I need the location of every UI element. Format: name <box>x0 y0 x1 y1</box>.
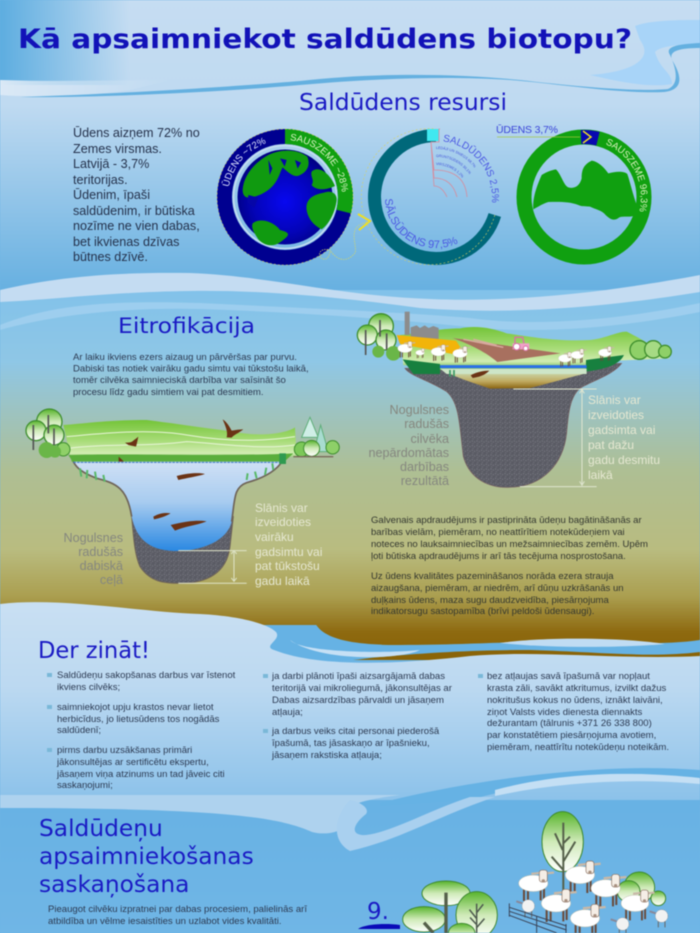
heading: Saldūdeņu apsaimniekošanas saskaņošana: Saldūdeņu <box>39 815 163 842</box>
pointer: water share <box>497 131 591 143</box>
labels: fresh water breakdown <box>436 146 476 178</box>
chart: salt and fresh water ring <box>360 128 502 266</box>
label: human-caused sediment: nepārdomātas <box>368 446 449 460</box>
text block: water quality signs: duļķains ūdens, maza sugu daudzveidība, piesārņojuma <box>371 595 609 606</box>
label: land 28%: SAUSZEME ~28% <box>290 133 349 192</box>
label: human-caused layer time: laikā <box>588 468 613 482</box>
right trees <box>293 417 339 457</box>
label: human-caused sediment: darbības <box>400 460 449 474</box>
text block: eutrophication intro: Dabiski tas notiek vairāku gadu simtu vai tūkstošu laikā, <box>73 364 309 374</box>
label: water 3.7%: ŪDENS 3,7% <box>496 124 558 136</box>
small trees <box>617 872 666 906</box>
meadow <box>63 420 297 462</box>
label: natural layer time: pat tūkstošu <box>255 559 320 573</box>
text block: water intro: Ūdenim, īpaši <box>73 188 150 202</box>
list: column 1: ikviens cilvēks; <box>57 682 120 693</box>
heading: Eitrofikācija: Eitrofikācija <box>118 314 255 338</box>
text block: water quality signs: indikatorsugu sastopamība (brīvi peldoši ūdensaugi). <box>371 606 594 617</box>
left trees <box>26 409 70 458</box>
list: column 1: jāsaņem viņa atzinums un tad jāveic citi <box>56 769 225 780</box>
label: salt water 97.5%: SĀLSŪDENS 97,5% <box>384 198 458 250</box>
label: human-caused layer time: gadsimta vai <box>588 423 655 437</box>
label: land 96.3%: SAUSZEME 96,3% <box>606 138 648 212</box>
list: column 2: ja darbi plānoti īpaši aizsargājamā dabas <box>271 671 445 682</box>
list: column 3: bez atļaujas savā īpašumā var nopļaut <box>487 671 650 682</box>
lake water <box>73 462 282 551</box>
flat-topped trees <box>403 881 497 933</box>
fish <box>471 371 489 378</box>
text block: coordination intro: Pieaugot cilvēku izpratnei par dabas procesiem, palielinās arī <box>48 904 307 915</box>
label: human-caused layer time: izveidoties <box>588 408 644 422</box>
text block: main threats: barības vielām, piemēram, no neattīrītiem notekūdeņiem vai <box>371 527 625 538</box>
mud layer <box>450 374 583 389</box>
list: column 1: herbicīdus, jo lietusūdens tos nogādās <box>57 714 220 725</box>
layer thickness marker <box>513 389 597 487</box>
label: water 72%: ŪDENS ~72% <box>221 137 266 187</box>
label: human-caused layer time: gadu desmitu <box>588 453 660 467</box>
label: natural sediment: Nogulsnes <box>63 531 123 545</box>
birds <box>119 419 243 462</box>
text block: water intro: būtnes dzīvē. <box>73 250 148 264</box>
list: column 2: jāsaņem rakstiska atļauja; <box>271 750 382 761</box>
chart: Earth water and land ring <box>216 128 354 266</box>
flock of sheep <box>516 861 668 933</box>
list: column 3: krasta zāli, savākt atkritumus, izvilkt dažus <box>487 683 667 694</box>
labels: fresh water breakdown: LEDĀJI UN SNIEGS 68,7% <box>436 146 476 168</box>
list: column 2: īpašumā, tas jāsaskaņo ar īpašnieku, <box>272 738 430 749</box>
label: natural sediment: ceļā <box>100 573 123 587</box>
page number: 9. <box>367 899 389 925</box>
tall tree <box>542 812 583 893</box>
label: natural layer time: Slānis var <box>255 501 308 515</box>
factory <box>405 312 439 340</box>
text block: water intro: saldūdenim, ir būtiska <box>73 204 195 218</box>
ploughed field <box>453 338 561 362</box>
list: column 1: saimniekojot upju krastos nevar lietot <box>57 702 214 713</box>
text block: water intro: bet ikvienas dzīvas <box>73 235 179 249</box>
list: column 3: piemēram, neattīrītu notekūdeņu noteikām. <box>487 742 669 753</box>
reeds <box>80 463 273 482</box>
text block: eutrophication intro: tomēr cilvēka saimnieciskā darbība var saīsināt šo <box>73 375 286 386</box>
text block: eutrophication intro: Ar laiku ikviens ezers aizaug un pārvēršas par purvu. <box>73 352 297 363</box>
sheep <box>398 341 614 367</box>
label: human-caused sediment: cilvēka <box>410 432 449 446</box>
label: fresh water 2.5%: SALDŪDENS 2,5% <box>443 134 500 203</box>
left trees <box>357 314 401 361</box>
meadow <box>400 327 670 370</box>
icon: globe <box>238 150 337 245</box>
list: column 1: jākonsultējas ar sertificētu ekspertu, <box>56 757 209 768</box>
text block: main threats: ļoti būtiska apdraudējums ir arī tās tecējuma nosprostošana. <box>371 551 626 562</box>
layer thickness marker <box>178 551 247 583</box>
text block: water intro: teritorijas. <box>73 173 128 187</box>
list: column 3: nokritušus kokus no ūdens, iznākt laivāni, <box>487 695 663 706</box>
heading: Saldūdeņu apsaimniekošanas saskaņošana: apsaimniekošanas <box>39 843 254 870</box>
page number <box>358 899 400 929</box>
list: column 2: teritorijā vai mikroliegumā, jākonsultējas ar <box>272 683 453 694</box>
list: column 2: Dabas aizsardzības pārvaldi un jāsaņem <box>272 695 444 706</box>
text block: water intro: Latvijā - 3,7% <box>73 157 149 171</box>
list: column 2: ja darbus veiks citai personai piederošā <box>271 726 440 737</box>
illustration: eutrophic lake cross-section <box>357 312 671 487</box>
label: human-caused layer time: pat dažu <box>588 438 634 452</box>
icon: map of Latvia <box>533 161 637 220</box>
labels: fresh water breakdown: VIRSZEMES 1,2% <box>436 162 464 178</box>
text block: main threats: Galvenais apdraudējums ir pastiprināta ūdeņu bagātināšanās ar <box>371 515 642 526</box>
label: natural sediment: dabiskā <box>80 559 123 573</box>
list: column 1: saskaņojumi; <box>57 780 113 791</box>
label: natural sediment: radušās <box>78 545 123 559</box>
right bushes <box>630 341 671 359</box>
text block: water intro: Zemes virsmas. <box>73 142 162 156</box>
reeds and banks <box>403 359 440 374</box>
text block: water intro: Ūdens aizņem 72% no <box>73 126 200 140</box>
list: column 1: Saldūdeņu sakopšanas darbus var īstenot <box>57 670 236 681</box>
list: column 1: pirms darbu uzsākšanas primāri <box>57 745 192 756</box>
label: human-caused sediment: Nogulsnes <box>389 403 449 417</box>
label: natural layer time: izveidoties <box>255 515 311 529</box>
text block: water intro: nozīme ne vien dabas, <box>73 219 200 233</box>
labels: fresh water breakdown: GRUNTSŪDENS 30,1% <box>436 154 471 174</box>
tractor <box>513 337 529 351</box>
sediment <box>405 363 622 487</box>
yellow field <box>397 335 467 357</box>
shallow water <box>440 362 587 371</box>
label: natural layer time: gadsimtu vai <box>255 545 322 559</box>
list: column 1 <box>47 670 238 791</box>
list: column 2 <box>263 671 455 761</box>
label: human-caused sediment: rezultātā <box>401 474 449 488</box>
list: column 3: dežurantam (tālrunis +371 26 338 800) <box>487 718 652 729</box>
list: column 1: saldūdenī; <box>57 725 101 736</box>
text block: water quality signs: Uz ūdens kvalitātes pazemināšanos norāda ezera strauja <box>371 571 614 582</box>
text block: main threats: noteces no lauksaimniecības un mežsaimniecības zemēm. Upēm <box>371 539 648 550</box>
chart: Latvia water and land ring <box>496 124 652 266</box>
fence <box>509 903 567 933</box>
arrow: from Earth ring to water ring <box>319 214 370 259</box>
list: column 3: par konstatētiem piesārņojuma avotiem, <box>487 730 656 741</box>
sediment <box>132 517 233 583</box>
label: natural layer time: gadu laikā <box>255 574 310 588</box>
label: human-caused sediment: radušās <box>404 417 449 431</box>
title: Kā apsaimniekot saldūdens biotopu? <box>18 24 632 55</box>
list: column 3: ziņot Valsts vides dienesta diennakts <box>487 707 643 718</box>
list: column 3 <box>478 671 669 753</box>
label: human-caused layer time: Slānis var <box>588 393 641 407</box>
heading: Der zināt!: Der zināt! <box>38 638 150 664</box>
illustration: trees and sheep <box>403 812 668 933</box>
freshwater marker <box>427 129 439 141</box>
label: natural layer time: vairāku <box>255 530 294 544</box>
text block: coordination intro: atbildība un vēlme iesaistīties un uzlabot vides kvalitāti. <box>48 916 282 927</box>
fish <box>153 473 207 531</box>
text block: eutrophication intro: procesu līdz gadu simtiem vai pat desmitiem. <box>73 387 264 398</box>
heading: Saldūdeņu apsaimniekošanas saskaņošana: saskaņošana <box>39 871 189 898</box>
illustration: natural lake cross-section <box>26 409 339 583</box>
list: column 2: atļauja; <box>272 707 303 718</box>
heading: Saldūdens resursi: Saldūdens resursi <box>299 90 507 116</box>
text block: water quality signs: aizaugšana, piemēram, ar niedrēm, arī dūņu uzkrāšanās un <box>371 583 624 594</box>
